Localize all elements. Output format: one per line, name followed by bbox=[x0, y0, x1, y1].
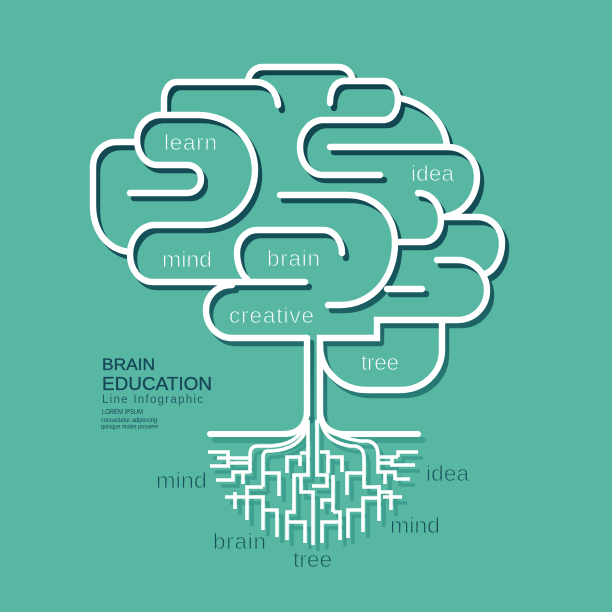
brain lobe line bbox=[237, 230, 342, 279]
lower right lobe line bbox=[320, 260, 487, 420]
root word: mind left: mind bbox=[156, 468, 207, 493]
top right arc bbox=[399, 98, 447, 146]
thick left root bbox=[210, 412, 307, 434]
learn and mind lobe line bbox=[130, 115, 305, 282]
small text line two: quisque moles posuere bbox=[101, 424, 159, 430]
top connector left bbox=[248, 67, 353, 80]
centre curve line bbox=[280, 195, 395, 305]
creative lobe line bbox=[206, 285, 307, 338]
small heading: LOREM IPSUM bbox=[102, 409, 143, 416]
title block bbox=[101, 355, 212, 430]
brain and tree outline bbox=[93, 67, 502, 420]
middle right hook line bbox=[397, 193, 441, 242]
root word: idea: idea bbox=[426, 461, 469, 486]
outer left lobe line bbox=[93, 142, 137, 252]
upper right lobe line bbox=[300, 81, 398, 175]
heading: education: EDUCATION bbox=[102, 374, 212, 394]
word: brain: brain bbox=[267, 246, 320, 271]
root word: brain: brain bbox=[213, 529, 266, 554]
tree lobe line bbox=[320, 320, 442, 390]
root word: tree: tree bbox=[293, 547, 332, 572]
lower left root branches bbox=[225, 473, 279, 537]
word: mind: mind bbox=[162, 247, 212, 272]
word: learn: learn bbox=[164, 130, 217, 155]
thick right root bbox=[320, 412, 418, 434]
subheading: Line Infographic bbox=[102, 394, 203, 406]
word: idea: idea bbox=[411, 161, 454, 186]
brain shadow bbox=[97, 72, 506, 425]
root word: mind right: mind bbox=[390, 513, 440, 538]
root shadow bbox=[213, 418, 423, 551]
right root fingers bbox=[378, 452, 418, 484]
right curved roots bbox=[321, 422, 379, 487]
word: creative: creative bbox=[229, 303, 314, 328]
left root fingers bbox=[208, 452, 250, 484]
centre left root branches bbox=[287, 420, 313, 545]
top left lobe line bbox=[164, 82, 278, 115]
left curved roots bbox=[250, 422, 307, 473]
tree roots bbox=[208, 412, 418, 545]
lower right root branches bbox=[347, 473, 402, 538]
short branch bbox=[387, 286, 422, 292]
heading: brain: BRAIN bbox=[102, 355, 155, 374]
right lobe line bbox=[443, 217, 502, 274]
small text line one: consectetur adipiscing bbox=[101, 418, 157, 424]
trunk left line bbox=[304, 338, 310, 415]
word: tree: tree bbox=[361, 350, 399, 375]
centre right root branches bbox=[312, 420, 342, 543]
idea lobe line bbox=[330, 147, 477, 216]
